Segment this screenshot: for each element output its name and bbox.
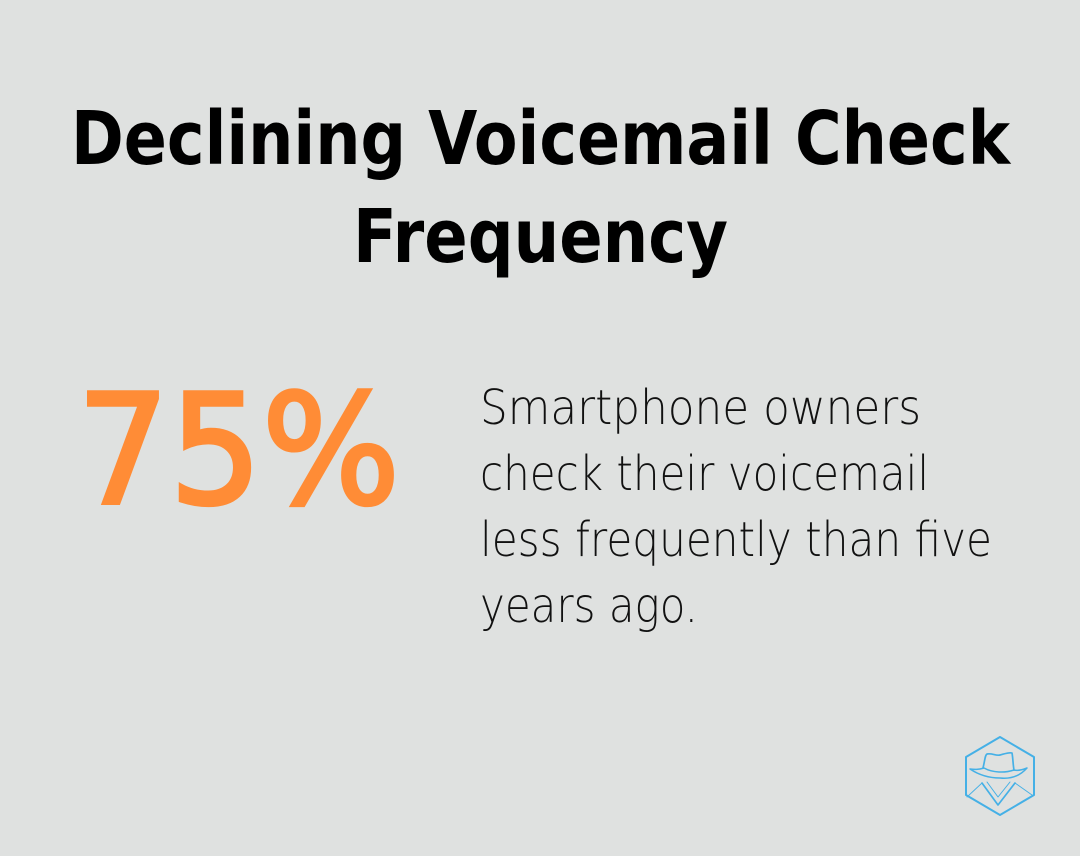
icon: hexagon spy logo — [966, 737, 1034, 815]
description text: Smartphone owners — [480, 380, 921, 436]
description text — [480, 380, 992, 634]
title — [71, 96, 1012, 280]
description text: years ago. — [480, 578, 698, 634]
statistic: 75%: 75% — [77, 362, 400, 539]
title: Frequency — [353, 194, 728, 280]
description text: less frequently than five — [480, 512, 992, 568]
description text: check their voicemail — [480, 446, 929, 502]
